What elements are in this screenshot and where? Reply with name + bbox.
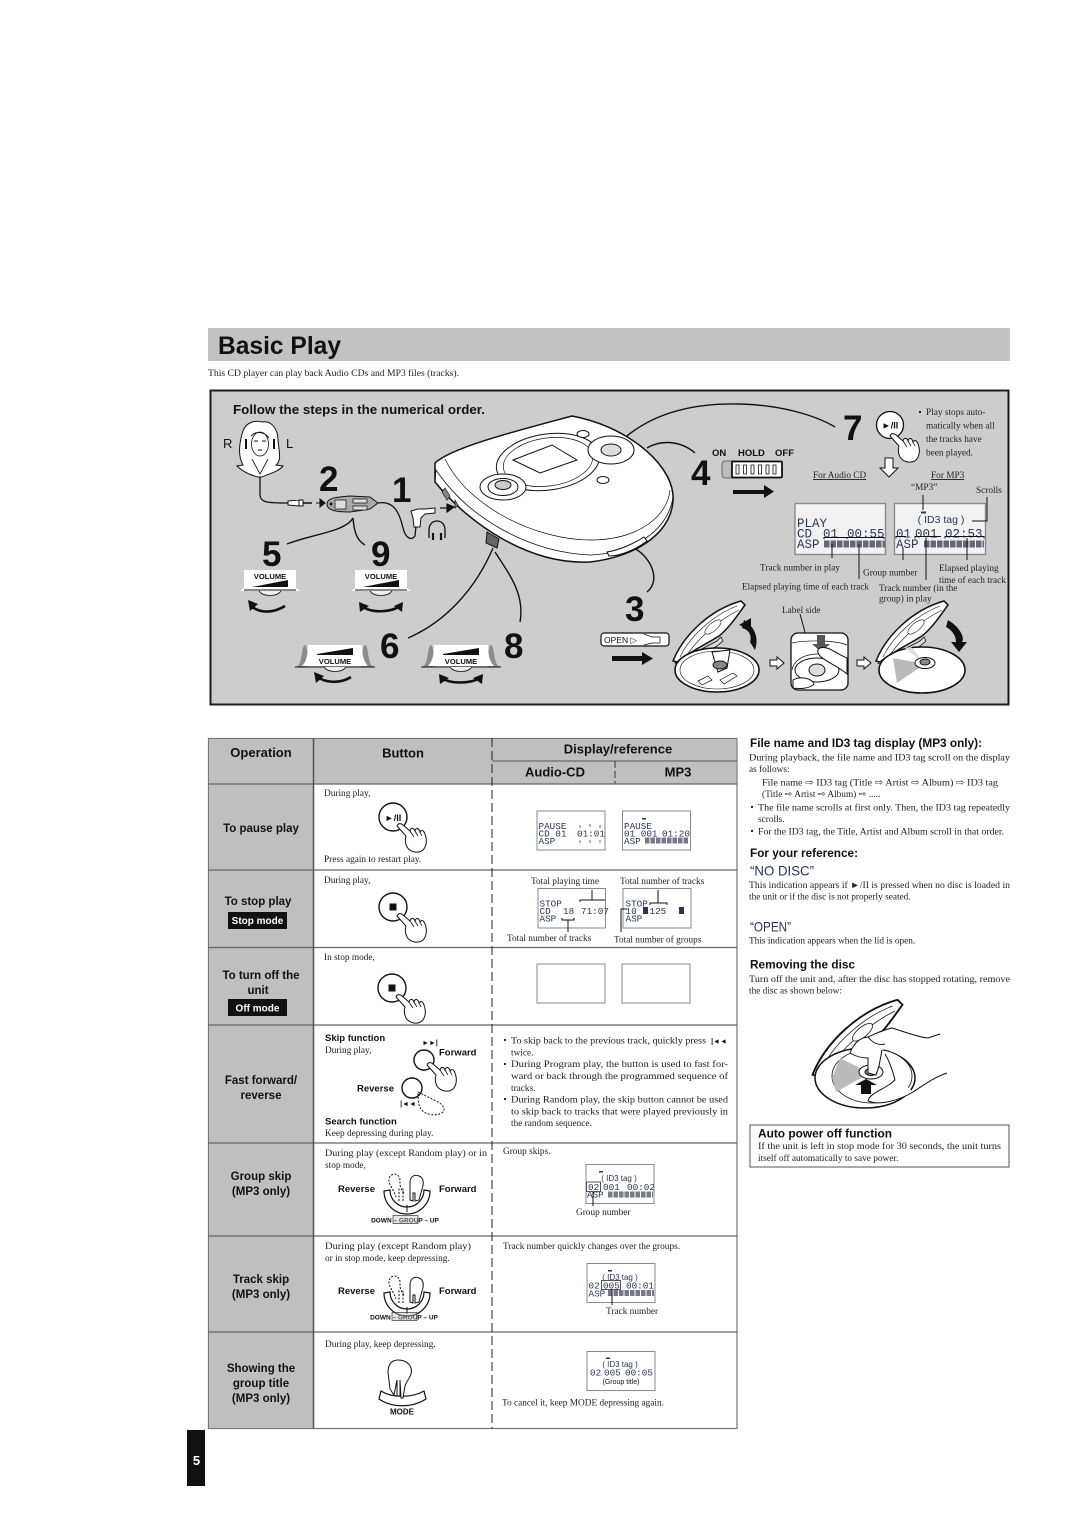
display: Audio CD play: CD — [797, 528, 812, 542]
row: stop: Total number of tracks — [507, 933, 592, 944]
row: turn off: unit — [247, 985, 269, 997]
display: pause audio: 01:01 — [577, 828, 605, 840]
section: for your reference: This indication appears when the lid is open. — [749, 936, 915, 946]
hold switch: step 4: HOLD — [738, 448, 765, 459]
row: group skip: During play (except Random play) or in — [325, 1148, 487, 1159]
section: for your reference: the unit or if the disc is not properly seated. — [749, 892, 911, 902]
row: pause: During play, — [324, 789, 370, 799]
display: blank MP3 — [622, 964, 690, 1003]
display: stop audio: 71:07 — [581, 906, 609, 917]
player open, disc loaded — [876, 601, 967, 693]
panel heading: Follow the steps in the numerical order. — [233, 402, 485, 417]
hold switch: step 4: ON — [712, 448, 726, 459]
display: Audio CD play — [795, 504, 886, 554]
row: fast forward and reverse: reverse — [241, 1090, 281, 1102]
note: play stops — [919, 408, 995, 458]
row: track skip: Track skip — [233, 1274, 289, 1286]
step numbers — [262, 409, 862, 666]
section: file name and ID3 tag display: scrolls. — [758, 815, 785, 825]
step numbers: 7 — [843, 409, 862, 448]
row: turn off: To turn off the — [222, 970, 300, 982]
section: removing the disc — [749, 960, 1010, 996]
display: pause MP3: ASP — [624, 836, 641, 847]
display: pause MP3: 01:20 — [662, 828, 690, 840]
display: stop MP3: 10 — [626, 906, 637, 917]
section: removing the disc: the disc as shown below: — [749, 986, 842, 996]
row: fast forward and reverse: Keep depressing during play. — [325, 1129, 433, 1139]
row: track skip: (MP3 only) — [232, 1289, 290, 1301]
section: for your reference: This indication appears if ►/II is pressed when no disc is loaded in — [749, 880, 1010, 891]
step numbers: 9 — [371, 535, 390, 574]
step numbers: 4 — [691, 454, 711, 493]
row: group title: (MP3 only) — [232, 1393, 290, 1405]
row: stop: Total playing time — [531, 877, 599, 887]
display: stop audio: ASP — [540, 914, 557, 924]
display: track number — [587, 1264, 655, 1305]
section: file name and ID3 tag display: (Title ⇨ Artist ⇨ Album) ⇨ ..... — [762, 789, 880, 800]
section: removing the disc: Removing the disc — [750, 960, 856, 972]
row: fast forward and reverse: Fast forward/ — [225, 1075, 298, 1087]
row: stop: Total number of tracks — [620, 876, 705, 887]
display callout lines — [800, 495, 987, 643]
skip notes: the random sequence. — [511, 1119, 592, 1129]
row: fast forward and reverse: During play, — [325, 1046, 371, 1056]
display: Audio CD play: PLAY — [797, 517, 828, 531]
icon: reverse button: Reverse — [357, 1084, 394, 1094]
display: MP3 play: ASP — [896, 538, 919, 552]
display callout labels: time of each track — [939, 575, 1006, 586]
display callout labels: Label side — [782, 606, 820, 616]
row: group skip: Group skip — [231, 1171, 291, 1183]
display: pause audio: PAUSE — [538, 821, 567, 832]
step numbers: 6 — [380, 627, 399, 666]
player open, empty — [673, 601, 759, 692]
volume dial: step 9 — [351, 570, 411, 612]
skip notes: During Program play, the button is used to fast for- — [511, 1059, 728, 1070]
display: track number: 005 — [603, 1280, 620, 1292]
display: Audio CD play: 00:55 — [847, 528, 885, 542]
section: file name and ID3 tag display: File name and ID3 tag display (MP3 only): — [750, 738, 982, 750]
display: group title — [587, 1352, 655, 1390]
badge: Stop mode: Stop mode — [232, 916, 284, 927]
table header: MP3 — [665, 764, 691, 780]
row: group title: Showing the — [227, 1363, 295, 1375]
display: stop MP3: STOP — [626, 898, 648, 910]
badge: Stop mode — [228, 912, 287, 929]
volume dial: step 5 — [240, 570, 300, 612]
display: stop audio: 18 — [563, 906, 574, 917]
display: group title: ( ID3 tag ) — [602, 1360, 638, 1369]
play button press: step 7 — [876, 412, 919, 462]
skip notes: |◄◄ — [711, 1038, 727, 1046]
icon: forward button: Forward — [439, 1048, 477, 1058]
table header: Button — [382, 746, 424, 760]
display: stop audio: STOP — [540, 898, 562, 910]
volume dial: step 6 — [295, 645, 375, 683]
row: group title: To cancel it, keep MODE depressing again. — [502, 1398, 664, 1408]
display: pause MP3: PAUSE — [624, 821, 652, 832]
row: group skip — [231, 1147, 655, 1224]
section: file name and ID3 tag display: During playback, the file name and ID3 tag scroll on the display — [749, 752, 1010, 764]
section: file name and ID3 tag display — [749, 738, 1010, 838]
skip notes: ward or back through the programmed sequence of — [511, 1071, 729, 1082]
display: group number: ASP — [587, 1190, 604, 1200]
row: track skip: Track number quickly changes over the groups. — [503, 1242, 680, 1252]
display: Audio CD play: 01 — [823, 528, 838, 542]
icon: group buttons: Forward — [439, 1184, 477, 1195]
display callout labels: group) in play — [879, 594, 932, 604]
remote control — [327, 496, 378, 512]
display: group title: 02 — [590, 1368, 601, 1378]
heading: Basic Play: Basic Play — [218, 332, 341, 360]
skip notes: tracks. — [511, 1084, 536, 1094]
icon: mode button — [379, 1360, 426, 1416]
display: MP3 play: 01 — [896, 528, 911, 542]
display: group title: 00:05 — [625, 1368, 653, 1378]
display: pause audio: CD 01 — [538, 828, 567, 840]
skip notes: to skip back to tracks that were played previously in — [511, 1108, 728, 1118]
icon: group buttons: DOWN – GROUP – UP — [371, 1218, 440, 1224]
hand gripping disc — [850, 1028, 947, 1103]
display: MP3 play: ( ID3 tag ) — [918, 514, 964, 526]
closeup: pressing disc label side — [791, 633, 848, 690]
display: group number: 02 — [588, 1182, 599, 1193]
row: group title: group title — [233, 1378, 289, 1390]
play button — [588, 436, 634, 464]
hold switch: step 4 — [712, 448, 794, 498]
display: blank audio — [537, 964, 605, 1003]
section: for your reference — [749, 848, 1010, 946]
icon: track buttons: Forward — [439, 1286, 477, 1297]
section: for your reference: “NO DISC” — [750, 862, 814, 878]
row: group skip: Group number — [576, 1208, 631, 1218]
hold switch: step 4: OFF — [775, 448, 794, 459]
step numbers: 1 — [392, 471, 411, 510]
earphone cord and plug — [260, 477, 325, 507]
heading: For MP3: For MP3 — [931, 471, 965, 481]
illustration: removing disc by hand — [812, 1000, 947, 1108]
icon: stop button — [379, 893, 426, 942]
row: turn off: In stop mode, — [324, 953, 375, 963]
badge: Off mode: Off mode — [236, 1004, 280, 1014]
display callout labels — [742, 564, 1006, 616]
display: pause audio: ASP — [538, 836, 556, 847]
icon: play/pause button — [379, 803, 426, 852]
headphone cable and jack — [378, 503, 454, 540]
row: pause: Press again to restart play. — [324, 855, 421, 865]
display callout labels: Track number (in the — [879, 583, 957, 594]
display callout labels: Elapsed playing time of each track — [742, 582, 869, 592]
section: for your reference: For your reference: — [750, 848, 858, 860]
table header: Operation — [230, 745, 292, 760]
note: play stops: matically when all — [926, 422, 995, 432]
open switch: step 3: OPEN ▷ — [604, 635, 637, 645]
display: group title: (Group title) — [603, 1379, 639, 1386]
icon: reverse button — [357, 1078, 444, 1115]
skip notes: twice. — [511, 1048, 533, 1058]
row: track skip: During play (except Random play) — [325, 1241, 471, 1252]
row: fast forward and reverse: Skip function — [325, 1033, 385, 1044]
arrow: lift up — [855, 1079, 877, 1094]
icon: listener with earphones — [223, 421, 293, 477]
skip notes: To skip back to the previous track, quickly press — [511, 1036, 706, 1046]
page number — [187, 1430, 205, 1486]
table header: Audio-CD — [525, 764, 585, 780]
display: MP3 play: 001 — [915, 528, 938, 542]
CD player body — [435, 416, 673, 562]
row: track skip: Track number — [606, 1307, 659, 1317]
volume wheel — [486, 532, 499, 548]
label: Scrolls: Scrolls — [976, 486, 1002, 496]
display: stop MP3: ASP — [626, 914, 643, 924]
display: group number: ( ID3 tag ) — [601, 1174, 637, 1183]
icon: forward button — [414, 1040, 477, 1091]
row: pause: To pause play — [223, 823, 300, 835]
section: file name and ID3 tag display: The file name scrolls at first only. Then, the ID3 tag repeatedly — [758, 802, 1010, 814]
icon: listener with earphones: L — [286, 436, 293, 451]
icon: group buttons: Reverse — [338, 1184, 375, 1195]
icon: track buttons: DOWN – GROUP – UP — [370, 1314, 439, 1322]
icon: track buttons: Reverse — [338, 1286, 375, 1297]
table header: Display/reference — [564, 742, 672, 756]
row: track skip — [232, 1241, 680, 1322]
row: fast forward and reverse — [225, 1033, 729, 1139]
display: group number — [586, 1164, 655, 1206]
display: group title: 005 — [604, 1368, 621, 1378]
display: MP3 play: 02:53 — [945, 528, 983, 542]
display: track number: ASP — [588, 1288, 606, 1300]
display callout labels: Elapsed playing — [939, 564, 999, 574]
step numbers: 2 — [319, 460, 338, 499]
selector button — [480, 474, 526, 500]
section: removing the disc: Turn off the unit and, after the disc has stopped rotating, remove — [749, 974, 1010, 985]
badge: Off mode — [228, 999, 287, 1016]
row: group skip: (MP3 only) — [232, 1186, 290, 1198]
play button press: step 7: ►/II — [882, 420, 898, 430]
panel: numbered steps — [210, 390, 1008, 704]
step numbers: 5 — [262, 535, 281, 574]
step numbers: 8 — [504, 627, 523, 666]
display: pause MP3 — [622, 811, 690, 850]
row: fast forward and reverse: Search function — [325, 1116, 397, 1128]
row: group title — [227, 1340, 664, 1416]
volume dial: step 8 — [421, 645, 501, 684]
icon: mode button: MODE — [390, 1408, 415, 1416]
callout: auto power off: itself off automatically to save power. — [758, 1153, 898, 1164]
row: stop: To stop play — [225, 896, 292, 908]
section: for your reference: “OPEN” — [750, 918, 791, 934]
arrow: down to displays — [880, 458, 898, 477]
row: group title: During play, keep depressing. — [325, 1340, 436, 1350]
open lever — [607, 537, 647, 556]
display: stop MP3 — [621, 888, 691, 932]
note: play stops: been played. — [926, 448, 973, 458]
note: play stops: the tracks have — [926, 435, 982, 445]
first column shading — [209, 784, 314, 1428]
callout: auto power off: If the unit is left in stop mode for 30 seconds, the unit turns — [758, 1141, 1001, 1152]
icon: reverse button: |◄◄ — [400, 1101, 416, 1108]
row: turn off — [222, 953, 690, 1023]
row: track skip: or in stop mode, keep depressing. — [325, 1254, 450, 1264]
arrow: hollow — [857, 657, 871, 669]
row: pause — [223, 789, 690, 865]
display: track number: ( ID3 tag ) — [602, 1273, 638, 1282]
display: track number: 00:01 — [626, 1280, 654, 1292]
icon: stop button — [378, 974, 425, 1023]
display: stop audio — [538, 888, 609, 932]
section: file name and ID3 tag display: File name ⇨ ID3 tag (Title ⇨ Artist ⇨ Album) ⇨ ID3 tag — [762, 778, 998, 788]
intro text: This CD player can play back Audio CDs and MP3 files (tracks). — [208, 368, 459, 379]
display: MP3 play — [894, 504, 986, 554]
row: stop: During play, — [324, 876, 370, 886]
leader lines — [287, 404, 835, 638]
display: stop audio: CD — [540, 906, 551, 917]
open switch: step 3 — [601, 633, 669, 665]
icon: play/pause button: ►/II — [385, 813, 401, 823]
display: pause audio — [537, 811, 605, 850]
callout: auto power off: Auto power off function — [758, 1128, 892, 1140]
skip notes — [504, 1036, 729, 1129]
row: group skip: stop mode, — [325, 1161, 366, 1171]
display callout labels: Group number — [863, 568, 918, 578]
display: Audio CD play: ASP — [797, 538, 820, 552]
player display window — [513, 445, 577, 473]
page number: 5 — [193, 1453, 200, 1468]
step numbers: 3 — [625, 590, 644, 629]
display: group number: 001 — [603, 1182, 620, 1193]
section: file name and ID3 tag display: For the ID3 tag, the Title, Artist and Album scroll in that order. — [758, 828, 1004, 838]
heading: For Audio CD: For Audio CD — [813, 471, 866, 481]
table: operations — [208, 738, 737, 1429]
section: file name and ID3 tag display: as follows: — [749, 764, 790, 775]
row: group skip: Group skips. — [503, 1147, 551, 1157]
skip notes: During Random play, the skip button cannot be used — [511, 1096, 728, 1106]
icon: track buttons — [338, 1276, 477, 1322]
display: group number: 00:02 — [627, 1182, 655, 1193]
arrow: hollow — [770, 657, 784, 669]
display callout labels: Track number in play — [760, 564, 840, 574]
icon: listener with earphones: R — [223, 436, 232, 451]
icon: forward button: ►►| — [422, 1040, 438, 1047]
table header — [209, 739, 737, 784]
row: stop — [225, 876, 705, 946]
display: pause MP3: 01 001 — [624, 828, 658, 840]
icon: group buttons — [338, 1174, 477, 1224]
display: track number: 02 — [588, 1280, 600, 1292]
row: stop: Total number of groups — [614, 934, 702, 946]
note: play stops: Play stops auto- — [926, 408, 985, 418]
label: MP3: “MP3” — [911, 483, 937, 493]
title bar — [208, 328, 1010, 361]
callout: auto power off — [750, 1125, 1009, 1167]
display: stop MP3: 125 — [650, 906, 666, 917]
